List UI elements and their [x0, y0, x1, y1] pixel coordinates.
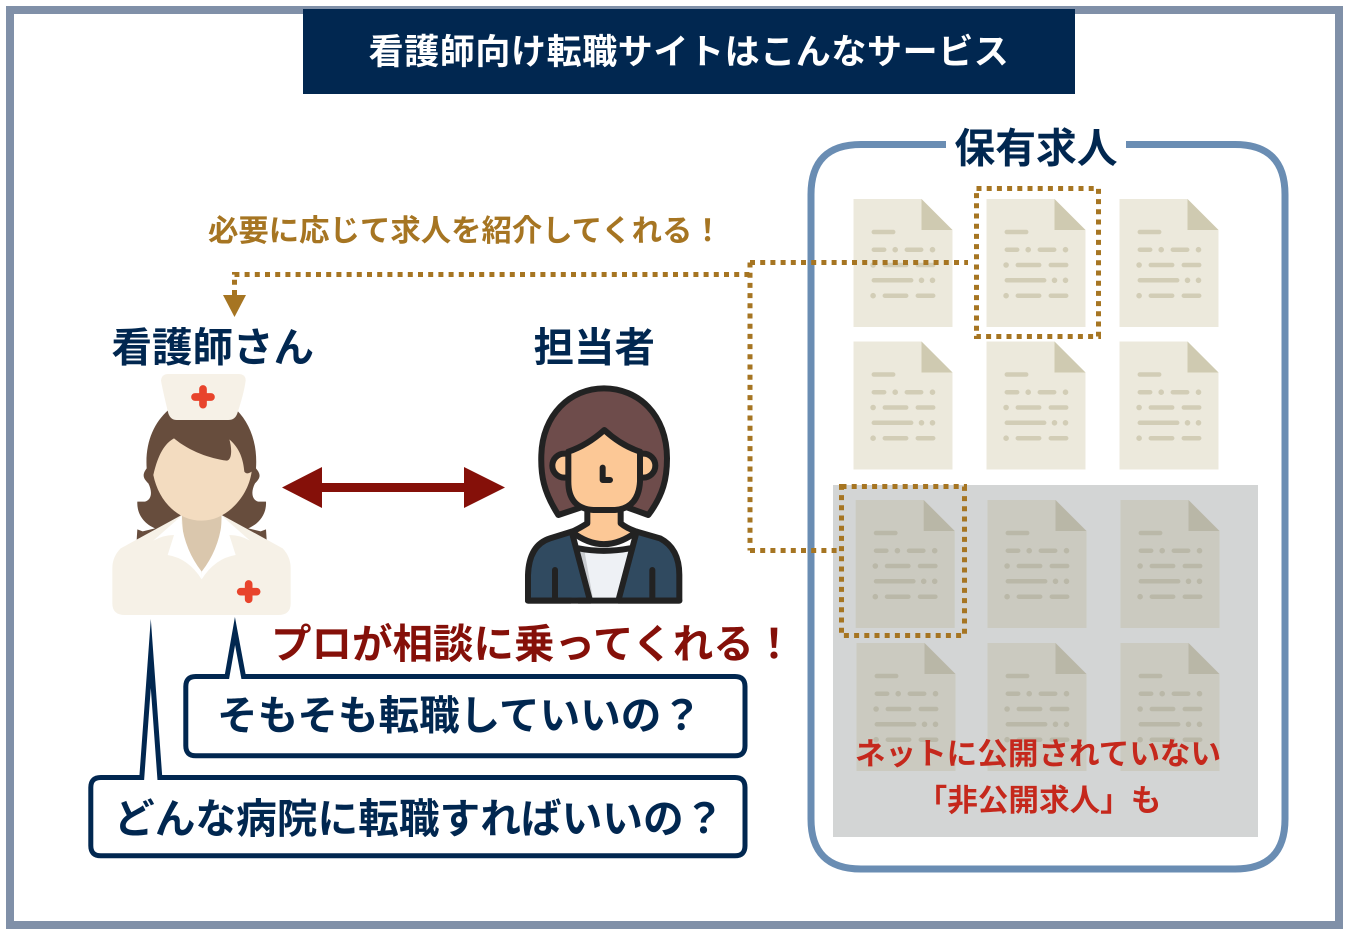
non-public jobs area [833, 485, 1258, 837]
speech bubble: which hospital [91, 654, 745, 856]
double-headed arrow [282, 467, 505, 508]
panel frame [811, 144, 1285, 869]
label: nurse: 看護師さん [112, 324, 314, 370]
public job documents [854, 199, 1218, 470]
title banner: 看護師向け転職サイトはこんなサービス [369, 33, 1009, 72]
speech bubble: which hospital: どんな病院に転職すればいいの？ [114, 796, 724, 842]
speech bubble: should I change jobs [186, 631, 745, 756]
caption: introduces jobs: 必要に応じて求人を紹介してくれる！ [208, 214, 723, 248]
icon: nurse [112, 374, 291, 615]
arrow head to nurse [223, 295, 246, 317]
title banner [303, 9, 1075, 94]
non-public jobs caption: 「非公開求人」も [917, 784, 1161, 818]
caption: professionals consult: プロが相談に乗ってくれる！ [271, 621, 794, 667]
dotted connector and selection boxes [234, 188, 1098, 636]
label: consultant: 担当者 [534, 324, 655, 370]
heading: listings held: 保有求人 [954, 126, 1118, 172]
panel: job listings [811, 126, 1285, 869]
speech bubble: should I change jobs: そもそも転職していいの？ [217, 692, 702, 738]
non-public jobs caption: ネットに公開されていない [855, 738, 1221, 772]
icon: consultant [528, 388, 679, 601]
